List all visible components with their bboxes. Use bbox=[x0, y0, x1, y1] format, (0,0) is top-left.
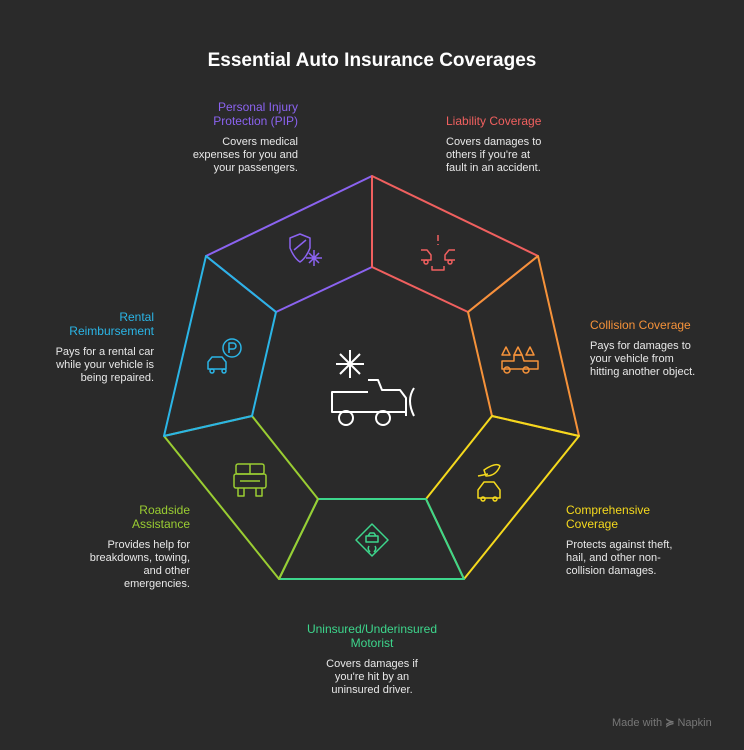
icon: collision truck trees bbox=[502, 347, 538, 373]
label: uninsured: Covers damages if you're hit by an uninsured driver. bbox=[326, 658, 418, 696]
icon: slippery road sign bbox=[356, 524, 388, 556]
label: comprehensive: Coverage bbox=[566, 517, 618, 531]
label: roadside: Assistance bbox=[132, 517, 190, 531]
title: Essential Auto Insurance Coverages bbox=[208, 50, 536, 71]
icon: liability cars bbox=[421, 235, 455, 270]
label: comprehensive bbox=[566, 503, 672, 577]
segment: comprehensive bbox=[426, 416, 579, 579]
segment: uninsured bbox=[279, 499, 464, 579]
label: PIP bbox=[193, 100, 298, 174]
label: rental: Rental bbox=[119, 310, 154, 324]
label: comprehensive: Protects against theft, hail, and other non-collision damages. bbox=[566, 539, 672, 577]
label: uninsured bbox=[307, 622, 437, 696]
segment: rental bbox=[164, 256, 276, 436]
icon: jeep bbox=[234, 464, 266, 496]
segment: liability bbox=[372, 176, 538, 312]
label: liability: Covers damages to others if you're at fault in an accident. bbox=[446, 136, 541, 174]
label: comprehensive: Comprehensive bbox=[566, 503, 650, 517]
label: uninsured: Uninsured/Underinsured Motorist bbox=[307, 622, 437, 650]
label: liability: Liability Coverage bbox=[446, 114, 541, 128]
label: collision: Pays for damages to your vehicle from hitting another object. bbox=[590, 340, 695, 378]
icon: comprehensive car leaf bbox=[478, 465, 500, 501]
icon: rental car P bbox=[208, 339, 241, 373]
label: collision: Collision Coverage bbox=[590, 318, 691, 332]
label: rental: Reimbursement bbox=[69, 324, 154, 338]
icon: shield snowflake bbox=[290, 234, 322, 266]
label: rental bbox=[56, 310, 154, 384]
label: roadside bbox=[90, 503, 190, 590]
label: roadside: Provides help for breakdowns, towing, and other emergencies. bbox=[90, 539, 190, 590]
footer: made with napkin: Made with ≽ Napkin bbox=[612, 717, 712, 729]
icon: central snowplow truck bbox=[332, 350, 414, 425]
segment: roadside bbox=[164, 416, 318, 579]
label: PIP: Covers medical expenses for you and your passengers. bbox=[193, 136, 298, 174]
label: liability bbox=[446, 114, 541, 174]
segment: PIP bbox=[206, 176, 372, 312]
label: collision bbox=[590, 318, 695, 378]
label: PIP: Personal Injury Protection (PIP) bbox=[213, 100, 298, 128]
segment: collision bbox=[468, 256, 579, 436]
label: rental: Pays for a rental car while your vehicle is being repaired. bbox=[56, 346, 154, 384]
label: roadside: Roadside bbox=[139, 503, 190, 517]
